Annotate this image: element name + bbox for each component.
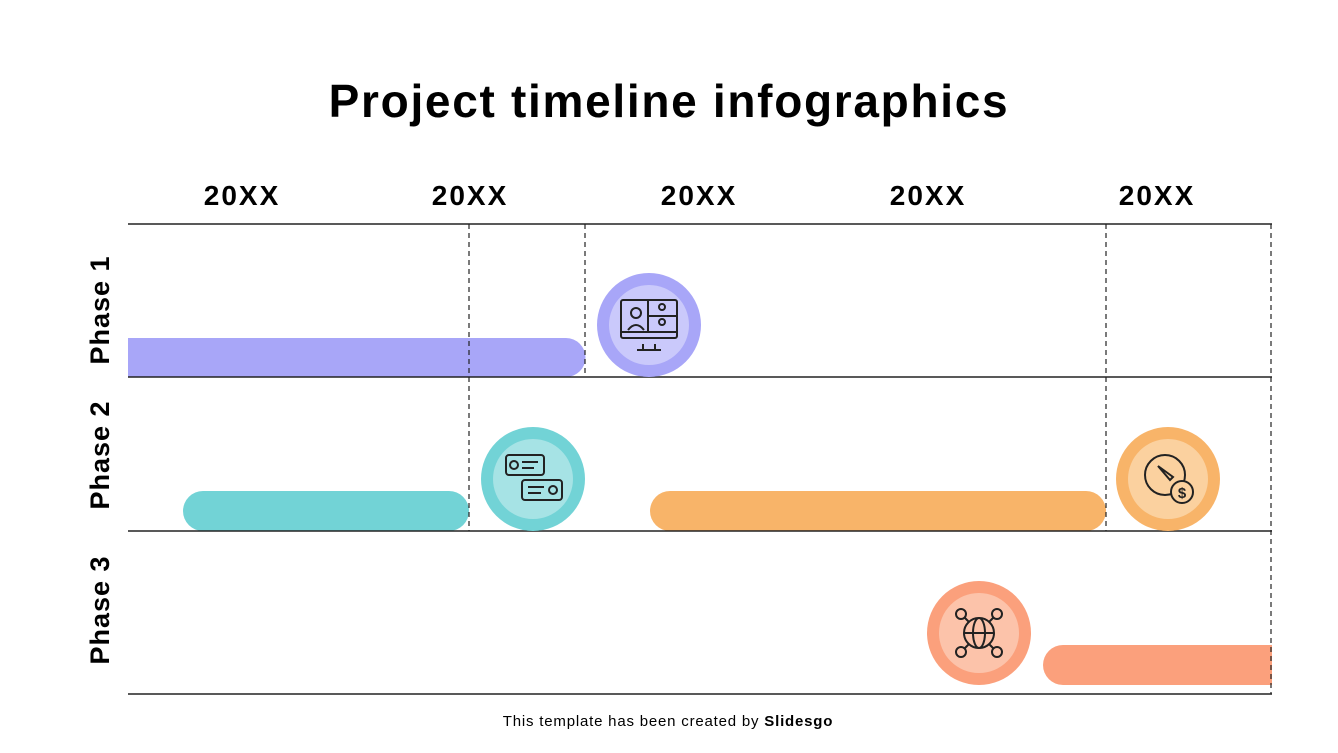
year labels: 20XX — [890, 180, 966, 211]
bar: phase 2 teal — [183, 491, 469, 531]
icon: global network — [927, 581, 1031, 685]
icon: chat — [481, 427, 585, 531]
phase labels: Phase 1 — [85, 255, 115, 365]
icon: video call monitor — [597, 273, 701, 377]
year labels: 20XX — [1119, 180, 1195, 211]
bar: phase 2 orange — [650, 491, 1106, 531]
phase labels: Phase 3 — [85, 555, 115, 665]
footer credit: This template has been created by Slidesgo — [503, 713, 833, 730]
phase labels: Phase 2 — [85, 400, 115, 510]
icon: compass dollar: $ — [1178, 485, 1187, 502]
phase labels — [85, 255, 115, 665]
year labels: 20XX — [204, 180, 280, 211]
title: Project timeline infographics — [329, 75, 1009, 127]
year labels: 20XX — [432, 180, 508, 211]
icon: compass dollar — [1116, 427, 1220, 531]
year labels — [204, 180, 1195, 211]
year labels: 20XX — [661, 180, 737, 211]
bar: phase 3 salmon — [1043, 645, 1272, 685]
bar: phase 1 purple — [128, 338, 586, 377]
